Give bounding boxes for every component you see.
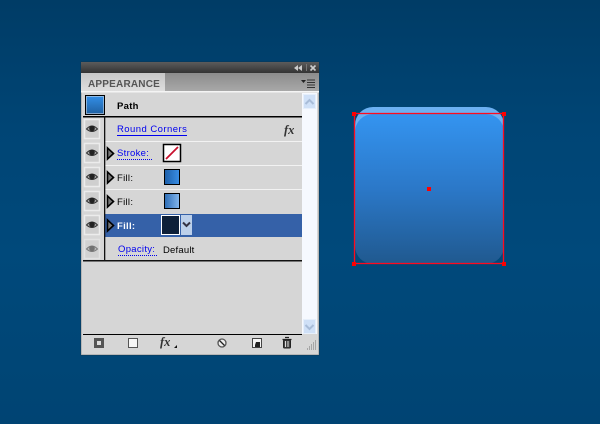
tab bar	[81, 73, 319, 91]
icon: add fill	[128, 338, 138, 348]
icon: clear	[218, 339, 226, 347]
icon: fx menu	[160, 335, 177, 349]
row: stroke: Stroke:	[117, 148, 149, 159]
row: fill 2	[84, 192, 180, 210]
row: round corners: fx	[284, 123, 294, 137]
icon shape: rounded blue square	[352, 107, 506, 266]
icon: trash	[282, 338, 292, 348]
row: fill 3 selected	[84, 214, 302, 237]
icon: fx menu: fx	[160, 335, 170, 349]
heading: appearance: APPEARANCE	[88, 79, 160, 90]
selection bounding box	[352, 112, 506, 266]
icon: resize grip	[308, 340, 316, 350]
icon: duplicate	[252, 338, 262, 348]
row: stroke	[84, 144, 180, 162]
icon: add stroke	[94, 338, 104, 348]
row: path header: Path	[117, 101, 139, 112]
row: fill 1	[84, 168, 180, 186]
row: opacity: Default	[163, 245, 195, 256]
row: opacity: Opacity:	[118, 244, 155, 255]
row: opacity	[84, 240, 195, 258]
panel: appearance	[81, 62, 319, 355]
panel title bar	[81, 62, 319, 73]
scrollbar	[302, 93, 317, 334]
row: round corners: Round Corners	[117, 124, 187, 135]
toolbar	[94, 335, 316, 350]
row: fill 3 selected: Fill:	[117, 221, 135, 232]
row: fill 1: Fill:	[117, 173, 133, 184]
row: fill 2: Fill:	[117, 197, 133, 208]
row: round corners	[84, 120, 294, 138]
row: path header	[86, 96, 139, 114]
